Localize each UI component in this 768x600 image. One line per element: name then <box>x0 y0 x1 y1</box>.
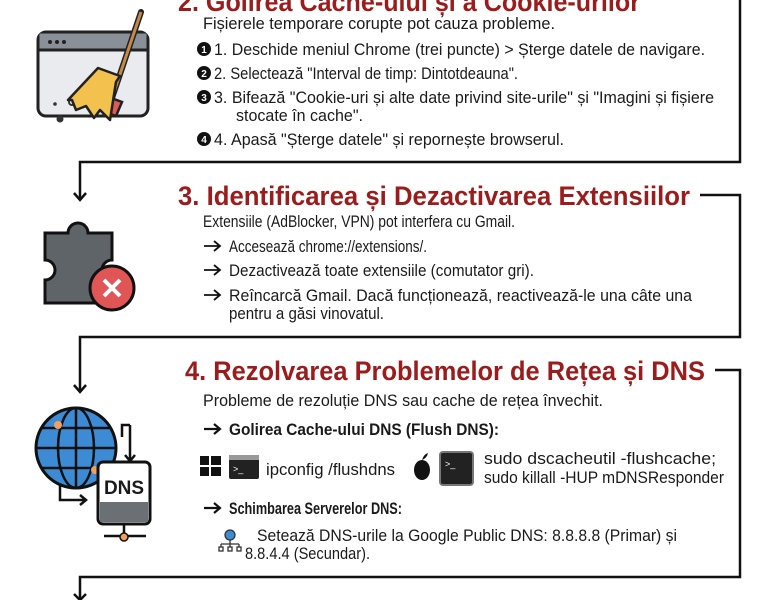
icon: terminal <box>440 452 473 485</box>
text block: section 3: pentru a găsi vinovatul. <box>229 305 384 323</box>
text block: section 4: sudo dscacheutil -flushcache; <box>484 450 716 468</box>
text block: section 2: 4 <box>201 135 207 146</box>
text block: section 4: Setează DNS-urile la Google Public DNS: 8.8.8.8 (Primar) și <box>257 527 677 545</box>
text block: section 3 <box>203 213 693 323</box>
heading: section 3: 3. Identificarea și Dezactivarea Extensiilor <box>178 181 690 211</box>
text block: section 2: 1 <box>201 45 207 56</box>
icon: globe and DNS server <box>36 408 150 541</box>
text block: section 2: 2. Selectează "Interval de timp: Dintotdeauna". <box>214 65 518 83</box>
icon: terminal: >_ <box>233 464 244 474</box>
icon: network <box>219 530 241 551</box>
text block: section 4: ipconfig /flushdns <box>266 461 395 479</box>
icon: apple <box>414 453 430 480</box>
text block: section 3: Reîncarcă Gmail. Dacă funcționează, reactivează-le una câte una <box>229 287 693 305</box>
icon: terminal <box>229 455 259 479</box>
text block: section 2: stocate în cache". <box>236 107 363 125</box>
text block: section 4: 8.8.4.4 (Secundar). <box>245 545 370 563</box>
text block: section 4: Schimbarea Serverelor DNS: <box>229 500 402 518</box>
icon: puzzle piece with x <box>45 223 134 310</box>
text block: section 4: Probleme de rezoluție DNS sau cache de rețea învechit. <box>203 392 603 410</box>
text block: section 3: Extensiile (AdBlocker, VPN) pot interfera cu Gmail. <box>203 213 515 231</box>
text block: section 2: Fișierele temporare corupte pot cauza probleme. <box>203 15 555 33</box>
text block: section 3: Dezactivează toate extensiile (comutator gri). <box>229 262 534 280</box>
icon: globe and DNS server: DNS <box>104 478 144 499</box>
text block: section 4: sudo killall -HUP mDNSResponder <box>484 469 724 487</box>
text block: section 2 <box>197 15 714 149</box>
text block: section 2: 1. Deschide meniul Chrome (trei puncte) > Șterge datele de navigare. <box>214 41 705 59</box>
heading: section 4: 4. Rezolvarea Problemelor de Rețea și DNS <box>185 356 705 386</box>
text block: section 2: 4. Apasă "Șterge datele" și repornește browserul. <box>214 131 564 149</box>
text block: section 2: 2 <box>201 69 207 80</box>
text block: section 2: 3 <box>201 93 207 104</box>
text block: section 3: Accesează chrome://extensions/. <box>229 238 427 256</box>
icon: terminal: >_ <box>445 459 456 469</box>
text block: section 4: Golirea Cache-ului DNS (Flush DNS): <box>229 421 499 439</box>
text block: section 2: 3. Bifează "Cookie-uri și alte date privind site-urile" și "Imagini și fișiere <box>214 89 714 107</box>
icon: windows <box>200 456 221 476</box>
text block: section 4 <box>200 392 724 563</box>
icon: browser with broom <box>38 12 148 122</box>
